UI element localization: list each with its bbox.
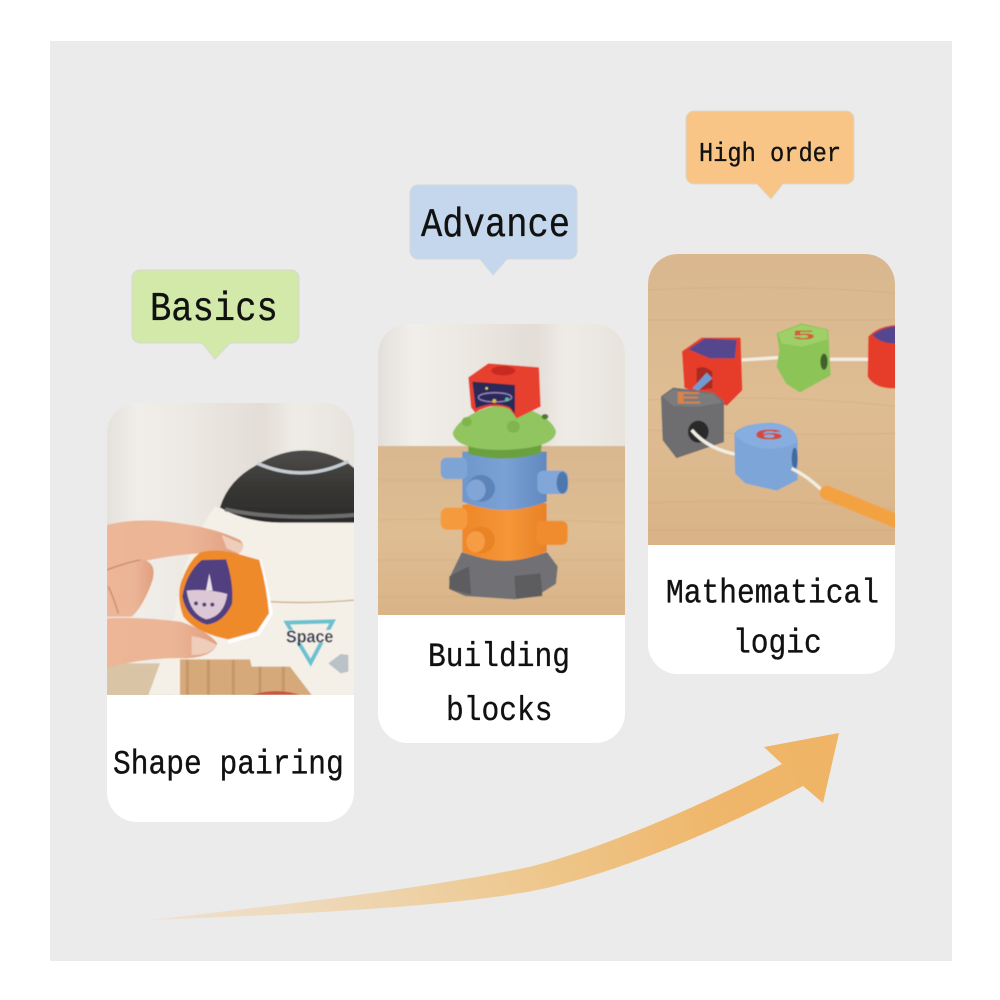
callout: basics: [132, 270, 299, 359]
growth arrow: [150, 733, 839, 920]
card background: [648, 254, 895, 674]
callout: advance: [410, 185, 577, 275]
photo: stacked blocks tower: [375, 320, 630, 619]
white halo around socket: [228, 560, 271, 642]
rocket icon: [328, 654, 348, 673]
blue block: [462, 452, 547, 510]
photo: threaded beads on a wooden table: 6: [754, 427, 784, 443]
red cube with planet face: [468, 363, 541, 418]
orange shape piece: [179, 550, 269, 639]
label: mathematical logic: Mathematical: [666, 574, 879, 613]
panel: mathematical logic card: [645, 250, 902, 674]
red disc bead: [867, 324, 895, 389]
callout: advance: Advance: [421, 203, 570, 249]
fingers: [107, 520, 243, 570]
panel: shape pairing card: [100, 400, 360, 822]
photo: hand placing orange shape on rocket: [100, 400, 360, 700]
green mushroom: [468, 445, 542, 459]
space logo: [287, 621, 333, 663]
blue bead: [734, 423, 798, 491]
callout: high order: High order: [699, 139, 841, 170]
label: mathematical logic: logic: [733, 624, 822, 663]
green bead: [777, 324, 830, 392]
callout: basics: Basics: [150, 287, 278, 333]
red bead: [683, 338, 742, 405]
label: mathematical logic: [666, 574, 879, 663]
orange needle: [827, 493, 902, 523]
label: building blocks: Building: [428, 637, 570, 677]
photo: threaded beads on a wooden table: 5: [792, 327, 817, 342]
gray bead: [662, 388, 723, 457]
label: building blocks: blocks: [446, 691, 553, 731]
card background: [107, 403, 354, 822]
gray base: [450, 553, 557, 598]
rocket body: [148, 507, 357, 695]
panel: building blocks card: [375, 320, 630, 743]
photo: threaded beads on a wooden table: E: [675, 388, 702, 407]
callout: high order: [686, 111, 854, 199]
photo: hand placing orange shape on rocket: Space: [286, 627, 333, 647]
label: shape pairing: Shape pairing: [113, 745, 344, 784]
orange block: [462, 500, 547, 561]
photo: threaded beads on a wooden table: [645, 250, 902, 550]
label: building blocks: [428, 637, 570, 731]
rocket dome: [220, 450, 357, 523]
card background: [378, 324, 625, 743]
string: [742, 357, 868, 360]
